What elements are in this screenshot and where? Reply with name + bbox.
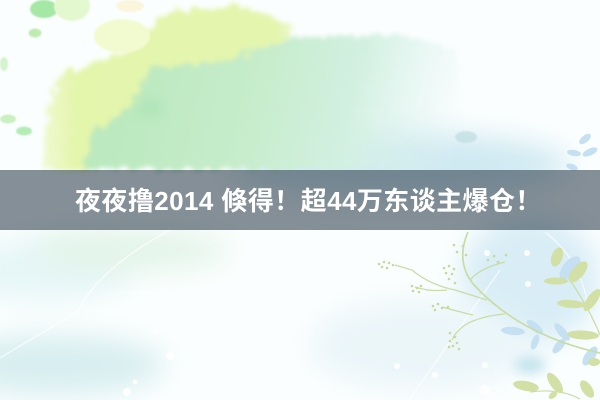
decorative circles [0,0,150,136]
plant: green leaves [512,246,600,400]
plant: seed clusters [378,244,507,350]
blue leaves [501,132,600,368]
plant: stems [395,232,600,399]
watercolor: green splash [82,34,480,170]
watercolor: yellow-green splash [42,6,292,170]
title band [0,170,600,230]
title: 夜夜撸2014 倏得！超44万东谈主爆仓！ [75,186,542,216]
white light streak and dots [0,230,590,399]
wash: blue tint areas [0,131,600,395]
